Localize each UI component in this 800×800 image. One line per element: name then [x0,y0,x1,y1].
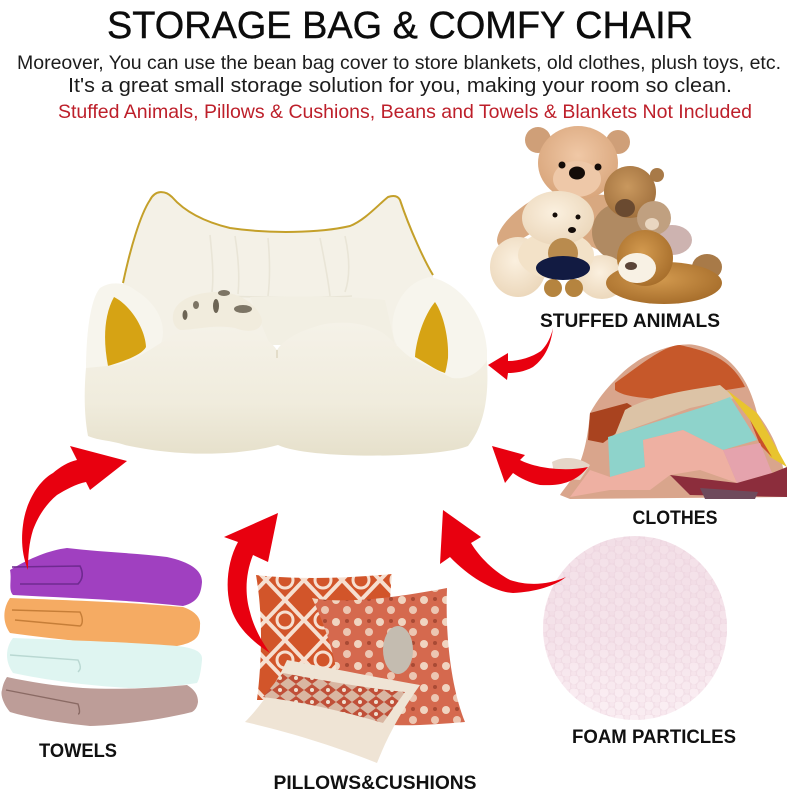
label: clothes: CLOTHES [632,508,718,529]
description text: Moreover, You can use the bean bag cover to store blankets, old clothes, plush toys, etc. [17,52,781,74]
right yellow ear [415,302,448,373]
arrow: stuffed animals to chair [488,328,553,380]
description text [17,52,781,97]
right patterned pillow [312,588,465,725]
not included notice: Stuffed Animals, Pillows & Cushions, Beans and Towels & Blankets Not Included [58,101,752,123]
chair backrest folds [200,235,352,297]
arrow: clothes to chair [492,446,588,485]
label: towels: TOWELS [39,741,117,762]
front lumbar pillow [245,660,420,763]
medium brown bear [592,166,664,260]
chair inner seat back [250,296,395,345]
aqua towel [7,638,202,688]
mauve towel [1,677,198,726]
small bear in navy shirt [536,238,590,297]
title: STORAGE BAG & COMFY CHAIR [107,5,693,47]
left armrest [86,283,163,372]
stuffed animals [490,126,722,304]
foam particles [543,536,727,720]
big bear body [497,193,625,260]
sleeping pet [173,290,262,331]
pillows and cushions [245,574,465,763]
pineapple motif [383,626,413,674]
left orange pillow [256,574,395,700]
towels [1,548,202,726]
arrow: pillows to chair [224,513,278,653]
seat divider [276,350,278,358]
clothes pile [552,344,787,499]
label: foam particles: FOAM PARTICLES [572,727,736,748]
purple towel [10,548,202,606]
left yellow ear [105,297,146,366]
description text: It's a great small storage solution for you, making your room so clean. [68,75,732,97]
orange towel [4,598,200,646]
right armrest [392,277,487,385]
chair front body and seat [85,323,487,456]
label: stuffed animals: STUFFED ANIMALS [540,311,720,332]
arrow: towels to chair [22,446,127,570]
arrow: foam to chair [440,510,566,593]
lumbar pillow patterned band [263,673,405,723]
golden bear [606,230,722,304]
label: pillows and cushions: PILLOWS&CUSHIONS [274,773,476,794]
cream bear [490,191,626,299]
lilac small bear [637,201,692,255]
chair illustration [85,192,487,456]
